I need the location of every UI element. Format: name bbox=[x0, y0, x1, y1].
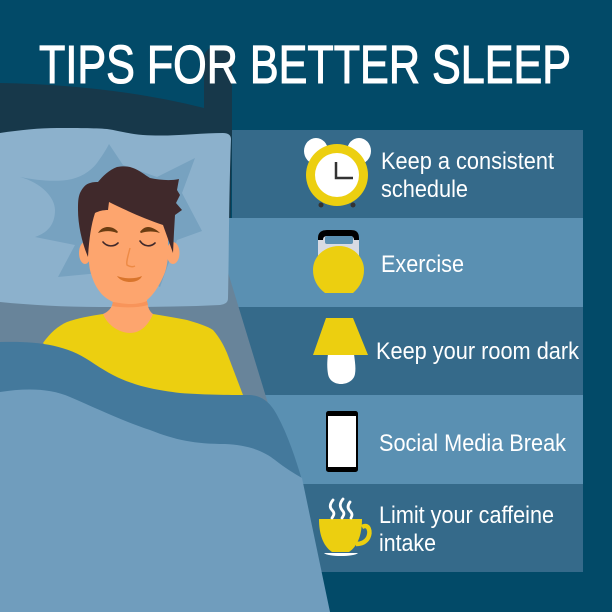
neck shadow bbox=[112, 301, 148, 307]
pillow crease bbox=[20, 144, 202, 287]
hair bbox=[78, 166, 182, 257]
tip text: exercise: Exercise bbox=[381, 251, 464, 278]
pillow bbox=[0, 128, 231, 307]
icon: coffee cup bbox=[319, 499, 369, 556]
tip text: caffeine: intake bbox=[379, 530, 436, 557]
tip text: social media: Social Media Break bbox=[379, 430, 567, 457]
panel: tip rows bbox=[228, 130, 583, 572]
ears bbox=[79, 242, 91, 264]
icon: kettlebell bbox=[313, 230, 364, 293]
mouth bbox=[117, 276, 142, 282]
blanket: light bbox=[0, 389, 330, 612]
tip text: schedule: schedule bbox=[381, 176, 468, 203]
icon: alarm clock bbox=[304, 138, 371, 208]
bed sheet bbox=[0, 256, 270, 410]
bed headboard bbox=[0, 45, 232, 262]
tip text: caffeine: Limit your caffeine bbox=[379, 502, 554, 529]
eyes bbox=[103, 241, 155, 246]
shirt bbox=[43, 314, 243, 400]
man sleeping bbox=[43, 166, 243, 400]
nose bbox=[127, 248, 135, 267]
eyebrows bbox=[98, 227, 160, 233]
face bbox=[88, 195, 168, 303]
tip text: room dark: Keep your room dark bbox=[376, 338, 580, 365]
tip text: schedule: Keep a consistent bbox=[381, 148, 554, 175]
blanket: dark fold bbox=[0, 342, 302, 500]
icon: phone bbox=[326, 411, 358, 472]
icon: lamp bbox=[313, 318, 368, 384]
neck bbox=[103, 295, 153, 333]
